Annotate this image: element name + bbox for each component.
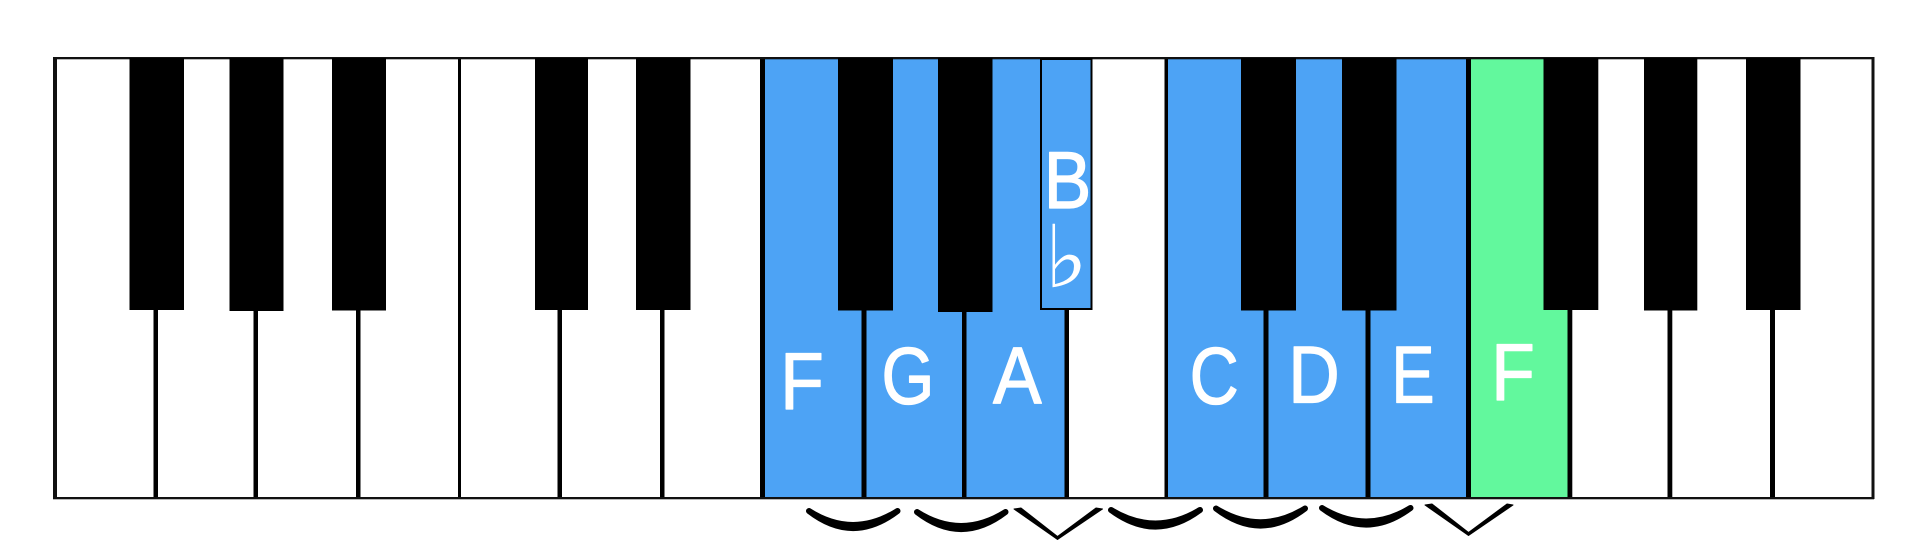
black keys [130, 58, 1800, 312]
unhighlighted white key B between scale segments [1069, 59, 1164, 497]
note label: B: B [1044, 136, 1091, 226]
whole and half step markers below the keys [809, 504, 1513, 540]
half step E to F [1425, 504, 1513, 536]
whole step F to G [809, 511, 898, 528]
B flat key highlighted in blue [1041, 59, 1092, 309]
note label: top F: F [1491, 328, 1535, 418]
whole step D to E [1322, 508, 1410, 524]
highlighted top F key in green [1471, 59, 1568, 497]
white key dividers [154, 57, 1775, 498]
note label: C: C [1190, 330, 1239, 421]
note label: A: A [993, 331, 1042, 421]
note label: G: G [882, 330, 934, 421]
note label: D: D [1288, 330, 1340, 421]
half step A to B flat [1014, 508, 1102, 540]
whole step B flat to C [1111, 510, 1200, 526]
note label: F: F [780, 337, 824, 427]
highlighted white keys: F major scale in blue [765, 59, 1466, 497]
keyboard outer frame [53, 57, 1874, 499]
note label: E: E [1391, 330, 1435, 420]
note label: flat sign: ♭ [1044, 208, 1088, 308]
whole step G to A [917, 512, 1006, 529]
whole step C to D [1216, 508, 1305, 526]
